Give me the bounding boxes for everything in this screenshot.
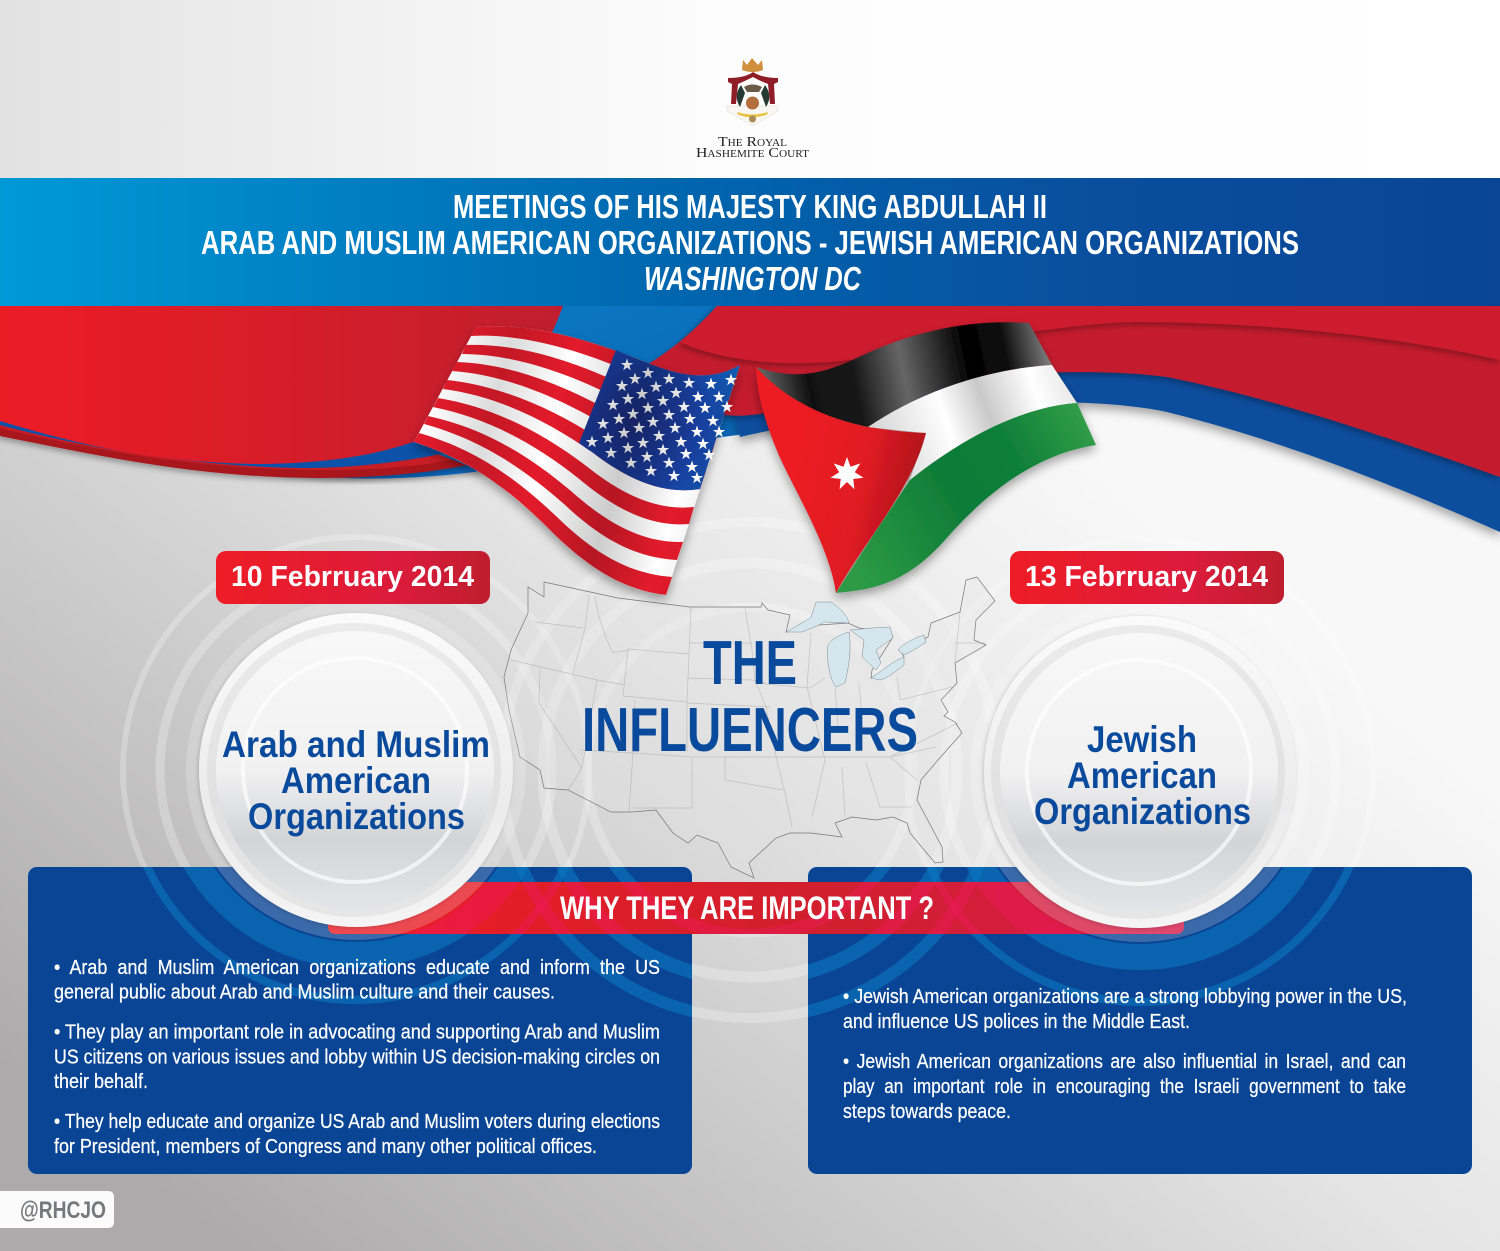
header banner (0, 178, 1500, 306)
panel text: steps towards peace. (843, 1100, 1011, 1123)
title: the influencers (582, 629, 918, 765)
concentric background rings (123, 522, 1373, 1018)
header title: MEETINGS OF HIS MAJESTY KING ABDULLAH II (453, 188, 1047, 225)
US flag (400, 320, 750, 600)
panel text: general public about Arab and Muslim culture and their causes. (54, 980, 555, 1004)
social handle badge (0, 1191, 114, 1228)
panel text: for President, members of Congress and many other political offices. (54, 1135, 597, 1158)
panel: Arab and Muslim American organizations (28, 867, 692, 1174)
date badge: 13 February (1010, 551, 1284, 604)
circle label: Arab and Muslim (222, 724, 490, 765)
seven-pointed star (830, 457, 864, 489)
circle label: Organizations (248, 796, 465, 837)
heading bar: why they are important (328, 882, 1184, 934)
panel text (54, 956, 660, 1158)
circle label: Jewish (1087, 719, 1197, 760)
date badge: 10 February: 10 Febrruary 2014 (231, 561, 474, 593)
circle label (1034, 719, 1251, 832)
top white band (0, 0, 1500, 180)
header location: WASHINGTON DC (644, 260, 862, 297)
panel text: US citizens on various issues and lobby within US decision-making circles on (54, 1046, 660, 1068)
date badge: 13 February: 13 Febrruary 2014 (1025, 561, 1268, 593)
great lakes (786, 602, 926, 687)
circle label: American (281, 760, 431, 801)
circle: Jewish American organizations (970, 602, 1310, 942)
panel text: • Arab and Muslim American organizations educate and inform the US (54, 956, 660, 979)
ribbon swoosh: blue and red bands behind the flags (0, 306, 1500, 532)
panel text: their behalf. (54, 1070, 148, 1093)
panel text: • They play an important role in advocating and supporting Arab and Muslim (54, 1020, 660, 1044)
logo: Royal Hashemite Court: Hashemite Court (696, 146, 809, 161)
circle label: Organizations (1034, 791, 1251, 832)
heading bar: why they are important: WHY THEY ARE IMPORTANT ? (560, 890, 934, 926)
logo: Royal Hashemite Court (696, 58, 809, 161)
flag canton (579, 350, 740, 490)
panel text: and influence US polices in the Middle East. (843, 1010, 1190, 1033)
panel text: • They help educate and organize US Arab and Muslim voters during elections (54, 1110, 660, 1133)
title: the influencers: THE (703, 629, 797, 698)
date badge: 10 February (216, 551, 490, 604)
title: the influencers: INFLUENCERS (582, 696, 918, 765)
Jordan flag (756, 322, 1096, 593)
panel text: • Jewish American organizations are a strong lobbying power in the US, (843, 985, 1407, 1008)
circle: Arab and Muslim American organizations (186, 600, 526, 940)
logo text: The Royal (718, 135, 787, 150)
map of the United States (504, 577, 995, 878)
circle label (222, 724, 490, 837)
flag stars (586, 358, 737, 483)
circle label: American (1067, 755, 1217, 796)
panel text: play an important role in encouraging the Israeli government to take (843, 1075, 1406, 1098)
icon: coat of arms (727, 58, 778, 126)
panel: Jewish American organizations (808, 867, 1472, 1174)
panel text (843, 985, 1407, 1123)
panel text: • Jewish American organizations are also influential in Israel, and can (843, 1050, 1406, 1073)
social handle badge: @RHCJO (20, 1197, 106, 1224)
